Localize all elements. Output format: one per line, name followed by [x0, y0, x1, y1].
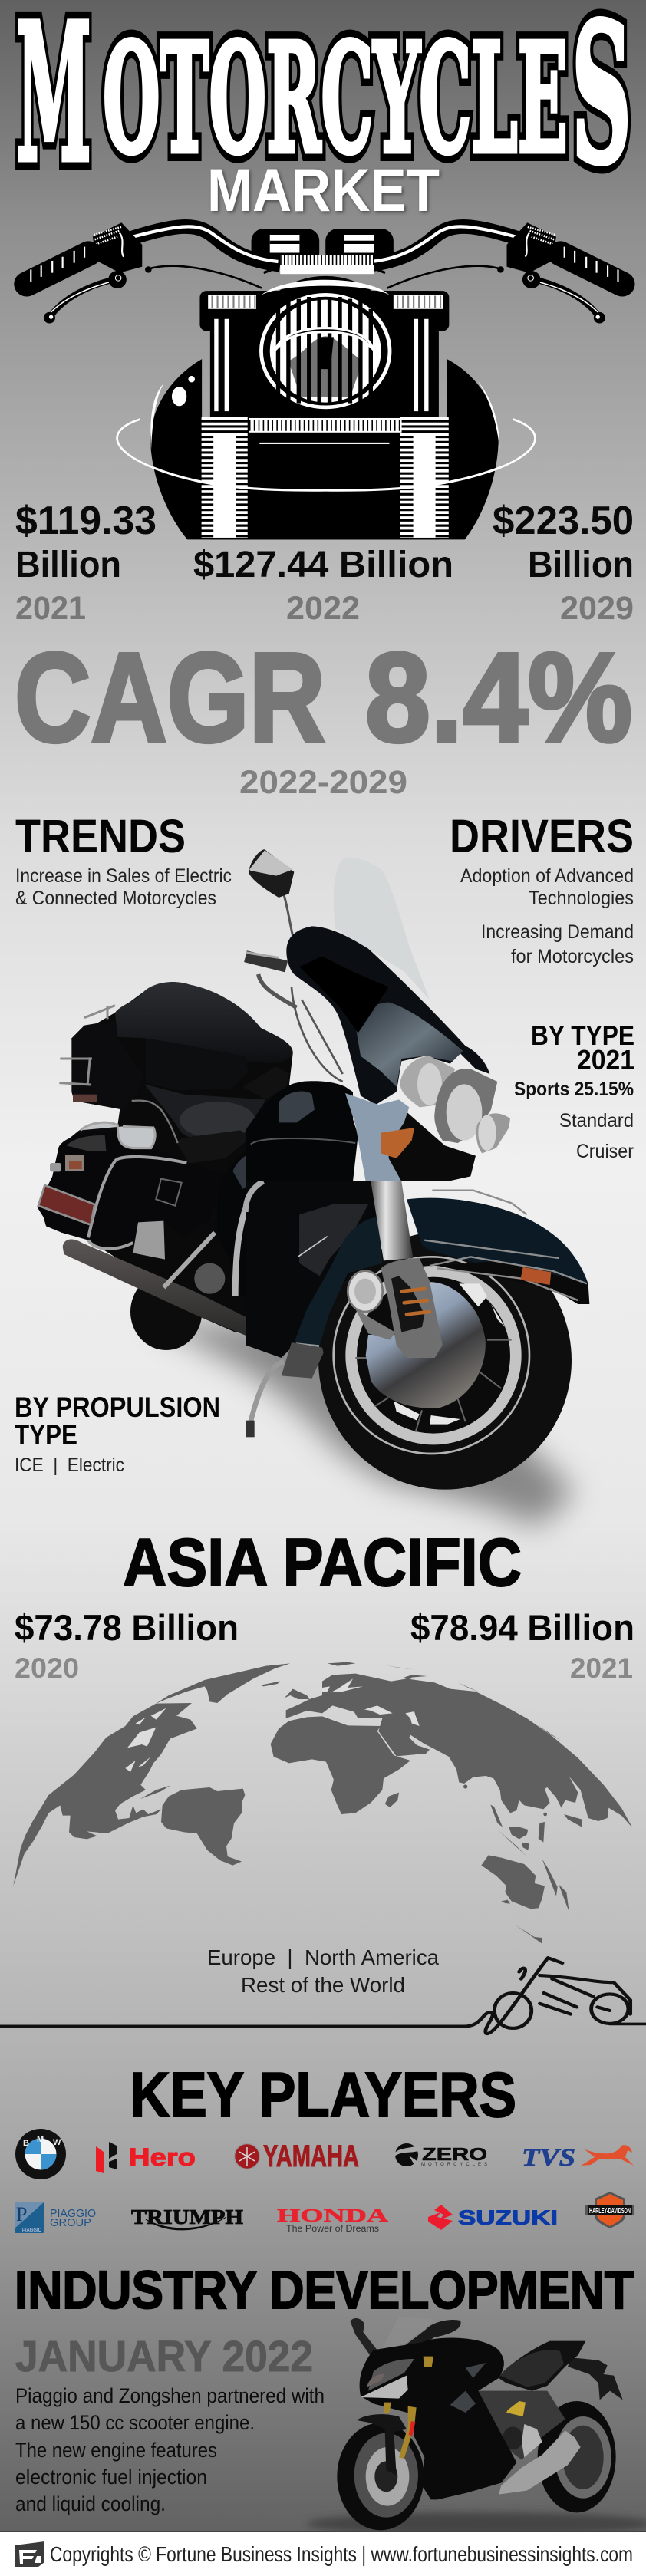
front wheel and fender: [246, 1181, 589, 1490]
logo: BMW: [15, 2129, 66, 2179]
line art: road and motorcycle: [0, 1958, 646, 2034]
by type panel: Standard: [559, 1110, 634, 1132]
windshield: [334, 858, 430, 1000]
tasmania: [501, 1900, 510, 1904]
fender dark band: [437, 1260, 589, 1304]
logo: Suzuki: SUZUKI: [458, 2206, 558, 2229]
drivers panel: for Motorcycles: [511, 946, 634, 967]
tank reflection: [279, 1091, 315, 1122]
cuba: [140, 1786, 170, 1799]
other regions: Europe | North America: [207, 1945, 439, 1969]
ring arc in front: [153, 467, 500, 490]
taiwan: [543, 1813, 547, 1816]
drivers panel: Technologies: [529, 888, 634, 909]
rear seat side: [243, 1066, 289, 1099]
indonesia and philippines: [490, 1805, 545, 1856]
black body: [246, 1181, 378, 1358]
other regions: [207, 1945, 439, 1997]
by type panel: 2021: [577, 1044, 634, 1076]
fairing highlights: [368, 2359, 414, 2391]
south america: [161, 1787, 245, 1866]
trends panel: [15, 810, 232, 909]
headlight: [361, 2376, 408, 2399]
value: 2029 market size: Billion: [528, 545, 634, 585]
fairing: [286, 926, 489, 1105]
exhaust pipe: [63, 1239, 286, 1350]
logo: Honda: [277, 2206, 389, 2234]
fender trim: [424, 1191, 587, 1300]
logo: Harley-Davidson: [585, 2192, 634, 2228]
seat: [144, 1084, 266, 1141]
tank trim: [251, 1138, 355, 1145]
CAGR period: 2022-2029: [239, 764, 407, 801]
seat: [500, 2350, 564, 2387]
exhaust: [499, 2430, 581, 2495]
disc cover: [366, 1282, 486, 1408]
logo: TVS: TVS: [522, 2144, 575, 2172]
frame bracket: [522, 2424, 542, 2457]
chrome lamp: [133, 1221, 165, 1260]
value: 2022 market size: $127.44 Billion: [193, 545, 453, 585]
seat base: [176, 1130, 251, 1164]
right headlight: [476, 1113, 510, 1153]
chrome crash bar: [236, 1183, 263, 1296]
engine area: [476, 2391, 565, 2460]
drivers panel: Increasing Demand: [481, 921, 634, 943]
world map globe: [13, 1662, 632, 1943]
fairing reflection: [355, 1003, 463, 1087]
footer: [0, 2531, 646, 2576]
chrome bar: [246, 1181, 263, 1212]
by propulsion type panel: TYPE: [15, 1419, 77, 1451]
tank highlights: [150, 376, 499, 450]
fork slit: [391, 1276, 424, 1332]
british isles: [285, 1689, 309, 1699]
backrest: [115, 982, 293, 1063]
logo: Piaggio Group: PIAGGIO: [22, 2228, 42, 2233]
development description: a new 150 cc scooter engine.: [15, 2411, 255, 2434]
shock absorber: [506, 2401, 526, 2416]
windscreen: [374, 2317, 435, 2364]
by type panel: Cruiser: [576, 1141, 634, 1162]
side panel glint: [450, 2363, 486, 2413]
bag guard: [88, 1157, 186, 1249]
photo: touring motorcycle: [37, 849, 589, 1527]
fairing window: [367, 2374, 385, 2387]
region value 2021: $78.94 Billion: [410, 1607, 634, 1648]
new guinea: [542, 1859, 558, 1896]
region value 2021: 2021: [570, 1652, 633, 1684]
logo: Triumph: TRIUMPH: [131, 2205, 243, 2228]
bag lid highlight: [67, 1135, 106, 1151]
logo: TVS: [522, 2144, 634, 2172]
hudson bay and lakes: [125, 1708, 166, 1772]
logo: Suzuki: [428, 2205, 558, 2230]
ground shadow: [146, 1319, 575, 1527]
fork marker: [409, 2421, 415, 2436]
logo: Piaggio Group: PIAGGIO: [50, 2207, 96, 2220]
main headlight: [434, 1069, 497, 1143]
bag handle: [81, 1122, 155, 1148]
trunk rack: [59, 1006, 115, 1085]
front of motorcycle: [246, 849, 510, 1181]
steering area: [381, 1110, 476, 1181]
value: 2021 market size: 2021: [15, 590, 86, 627]
subtitle: Market: MARKET: [207, 156, 440, 224]
bag vent: [156, 1179, 182, 1206]
logo: Piaggio Group: GROUP: [50, 2216, 91, 2229]
logo: Yamaha: [235, 2140, 359, 2173]
region value 2021: [410, 1607, 634, 1684]
by type panel: [514, 1020, 634, 1162]
trends panel: TRENDS: [15, 810, 186, 862]
white wall: [334, 1257, 529, 1454]
value: 2021 market size: $119.33: [15, 499, 157, 543]
value: 2029 market size: [493, 499, 634, 627]
lower back pad: [146, 1038, 248, 1091]
right mirror: [399, 2320, 461, 2357]
eurasia: [286, 1674, 632, 1828]
madagascar: [385, 1793, 399, 1807]
seat pillow: [180, 1102, 255, 1138]
front fender: [357, 2414, 407, 2476]
new zealand: [516, 1925, 542, 1943]
fork tube: [371, 1181, 413, 1260]
region heading: ASIA PACIFIC: [123, 1524, 522, 1600]
logo: Hero: [96, 2142, 196, 2173]
bag lamp: [50, 1155, 84, 1171]
trunk tail lamp: [73, 1095, 97, 1102]
by propulsion type panel: [15, 1392, 220, 1476]
fuel tank: [248, 1081, 353, 1138]
ground shadow: [307, 2512, 646, 2535]
trends panel: Increase in Sales of Electric: [15, 865, 232, 887]
tire: [318, 1231, 572, 1490]
logo: Zero Motorcycles: MOTORCYCLES: [421, 2163, 487, 2167]
drivers panel: [450, 810, 634, 967]
americas: [13, 1663, 290, 1886]
saddlebag: [37, 1132, 225, 1240]
front fork assembly: [199, 291, 449, 539]
development description: The new engine features: [15, 2439, 217, 2462]
trunk: [71, 1020, 143, 1110]
brake lines: [292, 987, 343, 1082]
tail hanger: [568, 2357, 623, 2400]
side cover: [217, 1137, 353, 1296]
inland seas: [322, 1678, 420, 1726]
handlebars: [27, 222, 622, 324]
drivers panel: Adoption of Advanced: [460, 865, 634, 887]
value: 2022 market size: 2022: [286, 590, 360, 627]
handlebar: [246, 953, 297, 1007]
tank highlight: [276, 1088, 312, 1118]
mirror: [249, 849, 294, 936]
development description: Piaggio and Zongshen partnered with: [15, 2384, 325, 2407]
fairing shadow: [299, 957, 389, 1033]
value: 2021 market size: Billion: [15, 545, 121, 585]
iceland: [261, 1682, 280, 1686]
by type panel: BY TYPE: [531, 1020, 634, 1051]
by type panel: Sports 25.15%: [514, 1079, 634, 1100]
engine fins: [299, 1199, 345, 1263]
fork tubes: [384, 2357, 433, 2459]
front wheel: [337, 2423, 424, 2530]
body fairing: [360, 2337, 516, 2499]
logo: Hero: Hero: [129, 2143, 196, 2171]
value: 2029 market size: 2029: [560, 590, 634, 627]
japan: [564, 1814, 582, 1827]
greenland: [156, 1663, 290, 1704]
fuel tank front: [246, 1081, 358, 1181]
gauges: [252, 229, 394, 265]
value: 2029 market size: $223.50: [493, 499, 634, 543]
development description: electronic fuel injection: [15, 2466, 207, 2489]
arctic islands: [328, 1662, 562, 1741]
rear half of motorcycle: [37, 982, 353, 1350]
africa, eurasia and oceania: [271, 1662, 632, 1943]
spokes: [355, 1340, 512, 1432]
logo: BMW: M: [37, 2135, 44, 2144]
engine side chrome: [194, 1263, 225, 1294]
side cover highlight: [232, 1145, 292, 1189]
footer logo: [15, 2541, 44, 2567]
australia: [481, 1855, 545, 1909]
logo: BMW: W: [53, 2138, 61, 2147]
wheel openings: [394, 1283, 505, 1425]
fender rear section: [294, 1217, 382, 1345]
orange bands: [401, 1289, 430, 1314]
trends panel: & Connected Motorcycles: [15, 888, 216, 909]
sri lanka: [463, 1784, 467, 1789]
logo: BMW: B: [23, 2139, 29, 2148]
rear wheel: [538, 2401, 616, 2512]
front fender: [407, 1198, 588, 1302]
lower pipe: [163, 1233, 215, 1287]
reflector: [520, 1267, 551, 1285]
pacific islands: [559, 1885, 569, 1912]
seat trim: [132, 1101, 178, 1143]
value: 2022 market size: [193, 545, 453, 627]
fuel tank: [150, 359, 499, 539]
region value 2020: 2020: [15, 1652, 79, 1684]
tail: [499, 2341, 585, 2391]
value: 2021 market size: [15, 499, 157, 627]
other regions: Rest of the World: [241, 1973, 405, 1997]
chrome triple clamp: [345, 1093, 409, 1181]
development description: [15, 2384, 325, 2515]
logo: Honda: The Power of Dreams: [286, 2223, 379, 2234]
engine case: [503, 2426, 523, 2449]
lower fork: [381, 1258, 443, 1358]
region value 2020: $73.78 Billion: [15, 1607, 239, 1648]
logo: Piaggio Group: [15, 2202, 96, 2233]
logo: Yamaha: YAMAHA: [263, 2140, 359, 2173]
engine cylinders: [299, 1204, 368, 1276]
kickstand: [246, 1362, 284, 1437]
region value 2020: [15, 1607, 239, 1684]
ring arc behind tank: [117, 420, 535, 467]
rear wheel: [130, 1273, 202, 1350]
logo: Honda: HONDA: [277, 2206, 389, 2226]
chrome glint: [298, 1237, 328, 1257]
by propulsion type panel: BY PROPULSION: [15, 1392, 220, 1423]
logo: Piaggio Group: P: [16, 2203, 27, 2225]
CAGR headline: 8.4%: [365, 627, 632, 768]
CAGR headline: [15, 627, 632, 768]
CAGR headline: CAGR: [15, 627, 325, 768]
development date: JANUARY 2022: [15, 2332, 313, 2381]
logo: Zero Motorcycles: [394, 2143, 487, 2167]
turn signal: [381, 1128, 414, 1158]
tail lights: [38, 1185, 94, 1225]
by propulsion type panel: ICE | Electric: [15, 1454, 124, 1476]
footboard: [282, 1342, 324, 1379]
photo: sport motorcycle: [307, 2317, 646, 2535]
left headlight: [400, 1056, 455, 1107]
illustration: motorcycle front view: [27, 222, 622, 539]
axle cap: [348, 1271, 395, 1340]
rim: [351, 1271, 516, 1439]
africa: [271, 1716, 410, 1814]
development description: and liquid cooling.: [15, 2492, 166, 2515]
headlight: [250, 276, 400, 414]
north america: [13, 1703, 197, 1886]
logo: Zero Motorcycles: ZERO: [422, 2144, 487, 2164]
left mirror: [351, 2318, 377, 2357]
key players heading: KEY PLAYERS: [130, 2059, 516, 2130]
dark body silhouette: [37, 984, 353, 1332]
